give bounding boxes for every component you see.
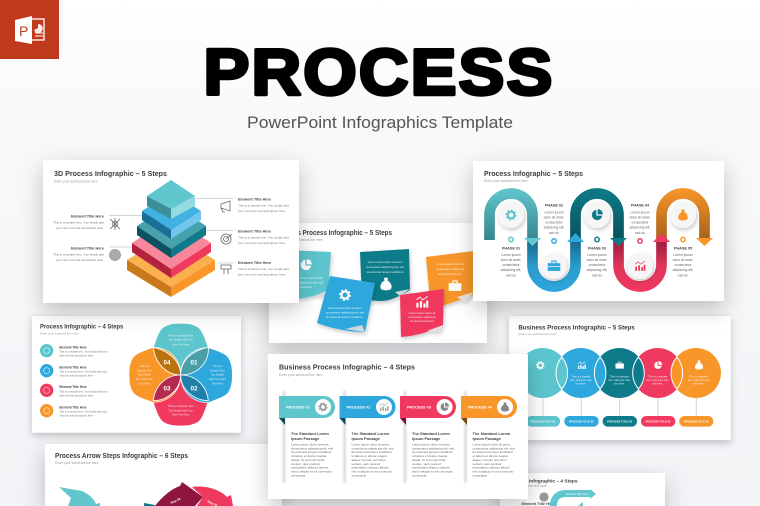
note: blue xyxy=(317,276,375,332)
subheading: Enter your subhead line here xyxy=(55,461,99,465)
left labels: This is a sample text. You simply add xyxy=(53,252,104,256)
note: light teal: adipiscing elit, sed xyxy=(300,280,323,284)
note: blue: consectetur adipiscing elit, sed xyxy=(326,310,364,314)
phase text: Lorem ipsum xyxy=(630,210,650,214)
flower diagram: Add Your Own xyxy=(209,377,226,381)
panel: business process, 5 steps circles xyxy=(509,316,731,440)
element list: This is a sample text. You simply add your xyxy=(59,350,107,354)
circle text: text here. xyxy=(693,382,704,386)
panel: sticky notes, 5 steps xyxy=(269,223,487,343)
flower diagram: This is a xyxy=(212,364,223,368)
card text 3: The Standard Lorem xyxy=(412,431,450,436)
card text 1: do eiusmod tempor incididunt xyxy=(291,450,332,454)
left labels: Element Title Here xyxy=(71,214,104,218)
panel: process arrow steps, 6 steps xyxy=(45,444,282,506)
process ribbon 4 xyxy=(461,396,517,425)
note: blue: Lorem ipsum dolor sit amet, xyxy=(328,306,362,310)
card text 4: ut labore et dolore magna xyxy=(472,454,508,458)
left labels: Element Title Here xyxy=(71,246,104,250)
panel: serpentine process, 5 steps xyxy=(473,161,724,301)
note: orange: Lorem ipsum dolor sit xyxy=(437,262,464,266)
note: dark teal: do eiusmod tempor incididunt xyxy=(367,270,403,274)
element list: Element Title Here xyxy=(59,385,87,389)
circle text: This is a sample xyxy=(689,374,709,378)
phase text: sed do xyxy=(678,274,688,278)
panel: process infographic, 4 steps flower xyxy=(32,316,241,433)
card text 2: Lorem ipsum dolor sit amet, xyxy=(352,442,390,446)
subheading: Enter your subhead line here xyxy=(54,180,98,184)
process ribbon 2 xyxy=(340,396,396,425)
card text 4: veniam, quis nostrud xyxy=(472,462,501,466)
layer: red xyxy=(132,217,211,278)
card text 3: exercitation ullamco laboris xyxy=(412,466,450,470)
card text 3: veniam, quis nostrud xyxy=(412,462,441,466)
flower diagram: Sample Text xyxy=(137,368,152,372)
process ribbon 1 xyxy=(279,396,335,425)
PowerPoint badge: P xyxy=(19,23,28,39)
phase text: Lorem ipsum xyxy=(544,210,564,214)
card text 1: consequat. xyxy=(291,474,306,478)
card text 3: do eiusmod tempor incididunt xyxy=(412,450,453,454)
flower diagram: You Simply xyxy=(138,373,152,377)
right labels xyxy=(238,198,289,276)
phase text: Lorem ipsum xyxy=(501,253,521,257)
maroon arrow: Step 04 xyxy=(170,497,181,505)
phase text: consectetur xyxy=(674,263,692,267)
card text 3 xyxy=(412,431,454,478)
flower diagram: This is a Sample Text xyxy=(168,333,194,337)
element list: This is a sample text. You simply add your xyxy=(59,370,107,374)
card text 2 xyxy=(352,431,394,478)
note: orange: do eiusmod tempor xyxy=(438,272,462,276)
flower diagram: Text Here xyxy=(139,381,151,385)
subheading: Enter your subhead line here xyxy=(279,373,323,377)
subtitle: PowerPoint Infographics Template xyxy=(247,113,513,132)
process pills: PROCESS TITLE 02 xyxy=(569,419,594,423)
phase text: adipiscing elit, xyxy=(544,226,564,230)
subheading: Enter your subhead line here xyxy=(484,179,528,183)
phase text: sed do xyxy=(592,274,602,278)
dark teal arrow xyxy=(144,503,155,506)
circle text: text, add your own xyxy=(608,378,631,382)
card text 3: Lorem ipsum dolor sit amet, xyxy=(412,442,450,446)
card text 2: The Standard Lorem xyxy=(352,431,390,436)
process ribbon 4: PROCESS #4 xyxy=(468,406,493,410)
card text 4: Ipsum Passage xyxy=(472,436,502,441)
arrow xyxy=(550,489,596,506)
card text 3: nisi ut aliquip ex ea commodo xyxy=(412,470,453,474)
flower diagram: This is a xyxy=(139,364,150,368)
note: red: consectetur adipiscing xyxy=(408,315,436,319)
right labels: This is a sample text. You simply add xyxy=(238,236,289,240)
process ribbon 1: PROCESS #1 xyxy=(286,406,310,410)
phase text: Lorem ipsum xyxy=(673,253,693,257)
title: PROCESS xyxy=(204,36,554,108)
heading: Process Infographic – 5 Steps xyxy=(484,169,583,178)
circle text: This is a sample xyxy=(648,374,668,378)
card text 4: The Standard Lorem xyxy=(472,431,511,436)
right labels: This is a sample text. You simply add xyxy=(238,204,289,208)
process ribbon 3 xyxy=(400,396,456,425)
right labels: Element Title Here xyxy=(238,198,271,202)
panel: business process, 4 steps arrows xyxy=(486,473,665,506)
gray icons xyxy=(110,201,232,274)
card text 4: nisi ut aliquip ex ea commodo xyxy=(472,470,514,474)
PowerPoint badge xyxy=(0,0,59,59)
phase labels: PHASE 03 xyxy=(588,246,606,250)
note: light teal: Lorem ipsum dolor xyxy=(300,276,323,280)
note: red: do eiusmod tempor xyxy=(410,319,434,323)
subheading: Enter your subhead line here xyxy=(518,332,557,336)
label: Element Title Here xyxy=(521,502,555,506)
phase text: consectetur xyxy=(588,263,606,267)
phase text: Lorem ipsum xyxy=(587,253,607,257)
circle text: text here. xyxy=(575,382,587,386)
connector lines xyxy=(543,398,696,416)
phase text: adipiscing elit, xyxy=(630,226,650,230)
card text 2: veniam, quis nostrud xyxy=(352,462,380,466)
note: orange xyxy=(426,251,474,305)
card text 4: exercitation ullamco laboris xyxy=(472,466,510,470)
flower diagram xyxy=(129,323,232,426)
phase text: adipiscing elit, xyxy=(673,268,693,272)
left labels: This is a sample text. You simply add xyxy=(53,220,104,224)
process ribbon 3: PROCESS #3 xyxy=(407,406,431,410)
card text 1: consectetur adipiscing elit, sed xyxy=(291,446,333,450)
flower diagram: Text Here xyxy=(212,381,224,385)
phase text: consectetur xyxy=(545,220,563,224)
phase labels: PHASE 02 xyxy=(545,204,563,208)
circle text xyxy=(570,374,710,386)
element list: This is a sample text. You simply add your xyxy=(59,389,107,393)
element list: own text and description here. xyxy=(59,414,94,418)
card text 3: Ipsum Passage xyxy=(412,436,441,441)
heading: Process Arrow Steps Infographic – 6 Steps xyxy=(55,451,188,460)
heading: 3D Process Infographic – 5 Steps xyxy=(54,169,167,178)
circle icons xyxy=(537,360,703,369)
phase text: dolor sit amet, xyxy=(544,216,564,220)
note: blue: do eiusmod tempor incididunt xyxy=(326,315,362,319)
left labels: your own text and description here. xyxy=(56,226,104,230)
phase text: sed do xyxy=(635,231,645,235)
element list: Element Title Here xyxy=(59,405,87,409)
right labels: Element Title Here xyxy=(238,230,271,234)
phase text: dolor sit amet, xyxy=(630,216,650,220)
heading: Business Process Infographic – 5 Steps xyxy=(273,230,392,237)
phase text: adipiscing elit, xyxy=(501,268,521,272)
heading: Process Infographic – 4 Steps xyxy=(40,323,124,330)
right labels: your own text and description here. xyxy=(238,241,286,245)
card text 2: ut labore et dolore magna xyxy=(352,454,387,458)
circle text: This is a sample xyxy=(571,374,591,378)
note: orange: consectetur adipiscing xyxy=(436,267,464,271)
disc icons xyxy=(506,209,688,271)
phase labels xyxy=(502,204,692,250)
note: dark teal xyxy=(360,249,410,301)
right labels: your own text and description here. xyxy=(238,209,286,213)
circle text: text here. xyxy=(652,382,663,386)
left labels: your own text and description here. xyxy=(56,258,104,262)
flower diagram: 03 xyxy=(163,386,171,393)
small markers xyxy=(509,237,685,243)
flower diagram: Add Your Own xyxy=(136,377,153,381)
circle text: text, add your own xyxy=(688,378,710,382)
phase labels: PHASE 05 xyxy=(674,246,692,250)
element list: own text and description here. xyxy=(59,354,94,358)
flower diagram: You Simply Add Your xyxy=(168,338,193,342)
subheading: Enter your subhead line here xyxy=(503,484,547,488)
card text 4: Lorem ipsum dolor sit amet, xyxy=(472,442,511,446)
card text 4: do eiusmod tempor incididunt xyxy=(472,450,513,454)
card text 3: ut labore et dolore magna xyxy=(412,454,448,458)
flower diagram: Own Text Here xyxy=(172,342,190,346)
phase labels: PHASE 04 xyxy=(631,204,650,208)
card text 2: consectetur adipiscing elit, sed xyxy=(352,446,394,450)
process pills: PROCESS TITLE 03 xyxy=(607,419,633,423)
note: red xyxy=(400,289,444,337)
card text 4: aliqua. Ut enim ad minim xyxy=(472,458,507,462)
card text 1: veniam, quis nostrud xyxy=(291,462,320,466)
note: dark teal: Lorem ipsum dolor sit amet, xyxy=(368,260,402,264)
maroon arrow xyxy=(155,482,203,506)
card text 2: aliqua. Ut enim ad minim xyxy=(352,458,386,462)
serpentine ribbon xyxy=(490,194,704,286)
note: light teal xyxy=(285,250,331,300)
card text 3: consequat. xyxy=(412,474,427,478)
flower diagram: You Simply xyxy=(211,373,225,377)
element list: own text and description here. xyxy=(59,393,94,397)
phase text: dolor sit amet, xyxy=(501,258,521,262)
subheading: Enter your subhead line here xyxy=(40,331,79,335)
note: dark teal: consectetur adipiscing elit, sed xyxy=(366,265,404,269)
card text 2: nisi ut aliquip ex ea commodo xyxy=(352,470,393,474)
icon discs xyxy=(498,202,696,279)
layer: light teal xyxy=(147,180,195,219)
flower diagram: This is a Sample Text xyxy=(168,404,194,408)
element list: own text and description here. xyxy=(59,374,94,378)
panel: business process, 4 steps cards xyxy=(268,354,528,499)
note: light teal: incididunt xyxy=(300,285,312,289)
card text 1: aliqua. Ut enim ad minim xyxy=(291,458,325,462)
circle text: text, add your own xyxy=(647,378,669,382)
process pills: PROCESS TITLE 05 xyxy=(684,419,709,423)
card text 2: do eiusmod tempor incididunt xyxy=(352,450,392,454)
card text 3: consectetur adipiscing elit, sed xyxy=(412,446,454,450)
arrow: Element Title Here xyxy=(566,492,588,496)
process pills: PROCESS TITLE 01 xyxy=(531,419,556,423)
card text 1: The Standard Lorem xyxy=(291,431,329,436)
card text 1: exercitation ullamco laboris xyxy=(291,466,329,470)
heading: Business Process Infographic – 4 Steps xyxy=(279,362,415,372)
card side shadows xyxy=(283,391,466,483)
phase text: adipiscing elit, xyxy=(587,268,607,272)
circle text: This is a sample xyxy=(610,374,629,378)
flower diagram: Own Text Here xyxy=(172,413,190,417)
right labels: your own text and description here. xyxy=(238,272,286,276)
card text 2: Ipsum Passage xyxy=(352,436,381,441)
element list: This is a sample text. You simply add your xyxy=(59,410,107,414)
phase text: sed do xyxy=(506,274,516,278)
flower diagram: You Simply Add Your xyxy=(168,408,193,412)
flower diagram: Sample Text xyxy=(210,368,225,372)
left labels xyxy=(53,214,104,262)
phase text: consectetur xyxy=(502,263,520,267)
circle text: text, add your own xyxy=(570,378,592,382)
arrowheads xyxy=(524,233,713,246)
card text 1: ut labore et dolore magna xyxy=(291,454,327,458)
right labels: Element Title Here xyxy=(238,261,271,265)
process pills: PROCESS TITLE 04 xyxy=(646,419,671,423)
card text 1: nisi ut aliquip ex ea commodo xyxy=(291,470,332,474)
circles xyxy=(518,348,721,398)
phase text: consectetur xyxy=(631,220,649,224)
process ribbon 2: PROCESS #2 xyxy=(346,406,370,410)
phase text: dolor sit amet, xyxy=(673,258,693,262)
leader lines xyxy=(109,198,233,263)
circle text: text here. xyxy=(614,382,625,386)
phase text: sed do xyxy=(549,231,559,235)
element list: Element Title Here xyxy=(59,365,87,369)
heading: Business Process Infographic – 4 Steps xyxy=(486,478,578,484)
teal arrow xyxy=(59,487,100,506)
flower diagram: 02 xyxy=(190,386,198,393)
flower diagram: 01 xyxy=(190,359,198,366)
panel: 3D process, 5 steps xyxy=(43,160,299,303)
card text 2: consequat. xyxy=(352,474,367,478)
heading: Business Process Infographic – 5 Steps xyxy=(518,324,635,331)
process pills xyxy=(526,416,713,427)
phase labels: PHASE 01 xyxy=(502,246,520,250)
phase text: dolor sit amet, xyxy=(587,258,607,262)
card text 3: aliqua. Ut enim ad minim xyxy=(412,458,446,462)
phase text xyxy=(501,210,693,278)
card text 1: Lorem ipsum dolor sit amet, xyxy=(291,442,329,446)
card text 4: consequat. xyxy=(472,474,488,478)
layer: dark teal xyxy=(137,203,206,258)
element list: Element Title Here xyxy=(59,345,87,349)
layer: orange xyxy=(127,233,215,297)
right labels: This is a sample text. You simply add xyxy=(238,267,289,271)
element list xyxy=(40,344,107,418)
flower diagram: 04 xyxy=(163,359,171,366)
layer: blue xyxy=(142,192,201,239)
card text 4 xyxy=(472,431,515,478)
card text 4: consectetur adipiscing elit, sed xyxy=(472,446,515,450)
note: red: Lorem ipsum dolor sit xyxy=(409,311,436,315)
pie icon xyxy=(539,492,549,502)
card text 1 xyxy=(291,431,333,478)
card text 2: exercitation ullamco laboris xyxy=(352,466,389,470)
card text 1: Ipsum Passage xyxy=(291,436,320,441)
red arrow xyxy=(192,487,233,506)
subheading: Enter your subhead line here xyxy=(279,238,323,242)
